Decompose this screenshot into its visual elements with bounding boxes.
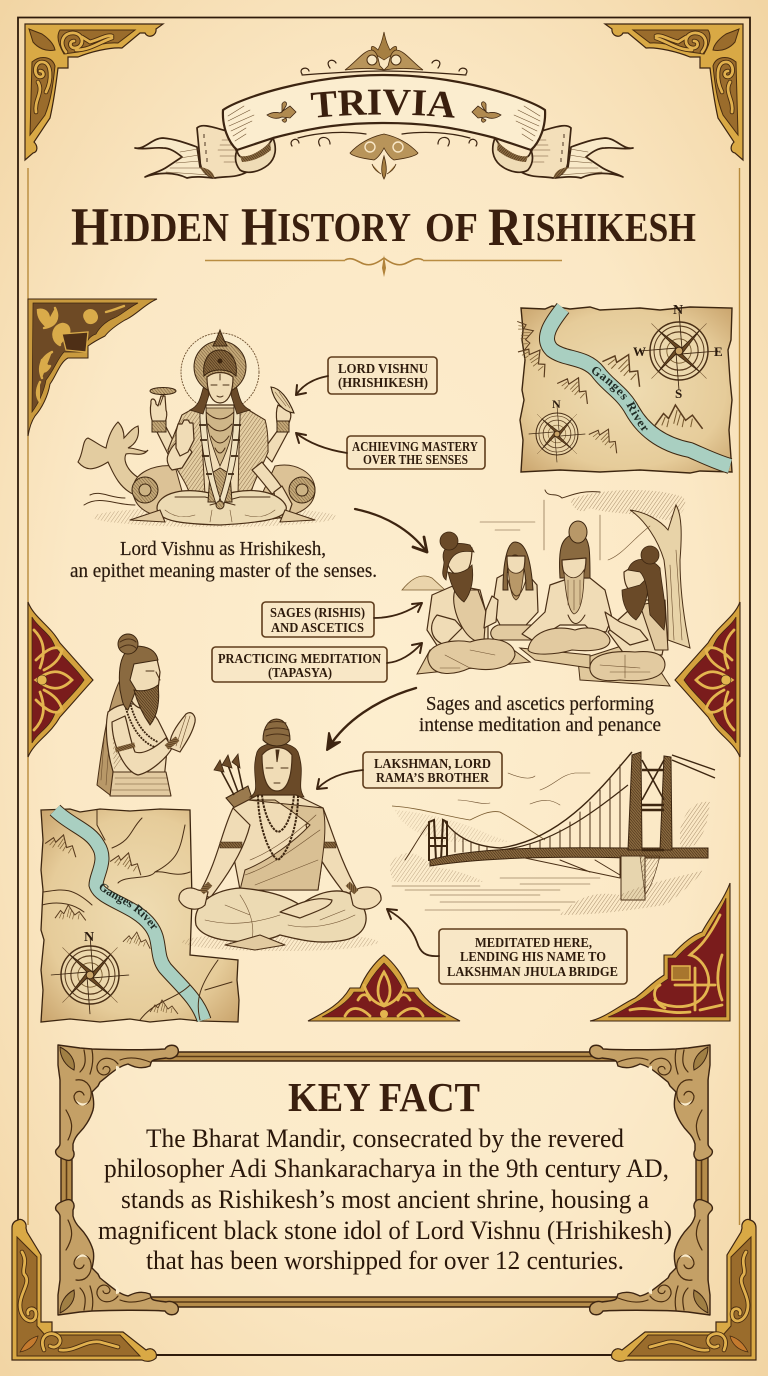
- compass small: N: [552, 397, 561, 411]
- deck: [430, 848, 708, 866]
- illustration: Lakshman meditating: [179, 719, 381, 951]
- compass large: N: [673, 303, 683, 318]
- corner ornament: top right: [605, 24, 743, 160]
- arrow: meditated callout: [387, 909, 439, 956]
- title divider: [205, 255, 562, 277]
- callout: meditated here: MEDITATED HERE,: [475, 935, 592, 950]
- lower cloth: [110, 772, 171, 796]
- bolsters: [132, 465, 315, 520]
- sage centre: [522, 521, 612, 654]
- mats: [417, 640, 530, 674]
- caption: sages: [419, 693, 661, 736]
- red ornament: bottom right corner: [590, 883, 730, 1021]
- praying hands: [170, 713, 195, 752]
- illustration: Lakshman Jhula bridge: [390, 752, 715, 915]
- callout: meditated here: LAKSHMAN JHULA BRIDGE: [447, 964, 618, 979]
- callout: sages and ascetics: [262, 602, 374, 637]
- compass: [51, 930, 129, 1014]
- torso: [106, 704, 168, 780]
- red side ornament: left: [28, 602, 93, 757]
- mountains: [515, 318, 703, 453]
- right ribbon tail: [493, 126, 633, 178]
- callout: Lord Vishnu: [328, 357, 437, 394]
- key fact body text: magnificent black stone idol of Lord Vishnu (Hrishikesh): [98, 1216, 672, 1245]
- river label: Ganges River: [592, 366, 648, 432]
- corner ornament: bottom left: [12, 1219, 156, 1361]
- top knot: [263, 719, 290, 746]
- callout: mastery over the senses: ACHIEVING MASTERY: [352, 439, 478, 454]
- main title: H: [241, 197, 277, 257]
- crossed legs: [157, 491, 286, 525]
- left ribbon tail: [135, 126, 275, 178]
- key fact body text: [98, 1124, 672, 1275]
- callout: practicing meditation: [212, 647, 387, 682]
- illustration: Lord Vishnu: [78, 330, 337, 527]
- main title: R: [488, 197, 523, 257]
- key fact body text: that has been worshipped for over 12 centuries.: [146, 1246, 624, 1275]
- callout: meditated here: [439, 929, 627, 984]
- arrow: mastery callout: [296, 433, 347, 453]
- callout: mastery over the senses: OVER THE SENSES: [363, 452, 468, 467]
- callout: Lord Vishnu: LORD VISHNU: [338, 361, 428, 376]
- sage at back: [491, 542, 542, 640]
- red side ornament: right: [675, 602, 740, 757]
- callout: mastery over the senses: [347, 436, 485, 469]
- compass: N: [84, 930, 94, 945]
- banner title text: TRIVIA: [310, 90, 455, 118]
- crown halo ring: [194, 341, 246, 393]
- river label: Ganges River: [100, 884, 158, 930]
- clouds: [458, 773, 590, 805]
- river: [547, 308, 730, 466]
- caption: sages: intense meditation and penance: [419, 714, 661, 736]
- hills: [392, 806, 545, 840]
- quiver and arrows: [214, 754, 252, 812]
- sage right: [590, 546, 668, 681]
- callout: Lakshman: [363, 752, 502, 788]
- sash: [240, 800, 325, 890]
- arrow: meditation callout: [387, 643, 422, 663]
- ornate frame: [56, 1045, 712, 1315]
- red ornament: bottom centre: [308, 955, 460, 1021]
- map: Ganges River upper: [517, 303, 733, 474]
- garlands: [200, 405, 240, 504]
- illustration: praying sage: [97, 634, 195, 796]
- callout: Lakshman: LAKSHMAN, LORD: [374, 756, 491, 771]
- callout: sages and ascetics: AND ASCETICS: [271, 620, 364, 635]
- main ribbon band: [223, 75, 545, 150]
- arm: [112, 716, 172, 775]
- arrow: Lord Vishnu callout: [296, 376, 328, 395]
- key fact body text: The Bharat Mandir, consecrated by the revered: [146, 1124, 624, 1153]
- necklaces: [258, 795, 298, 860]
- callout: meditated here: LENDING HIS NAME TO: [460, 949, 606, 964]
- torso: [230, 795, 325, 890]
- ground shading: [93, 507, 337, 527]
- crown finial: [213, 330, 227, 346]
- caption: Lord Vishnu: Lord Vishnu as Hrishikesh,: [120, 538, 326, 560]
- suspension cables: [445, 752, 632, 848]
- tributaries and mountains: [42, 810, 232, 1020]
- necklaces: [125, 702, 158, 748]
- key fact body text: philosopher Adi Shankaracharya in the 9th century AD,: [104, 1154, 669, 1183]
- hair: [250, 743, 304, 797]
- callout: Lakshman: RAMA’S BROTHER: [376, 770, 489, 785]
- crest above banner: [301, 32, 467, 75]
- pier: [621, 856, 645, 900]
- arrow: sages to Lakshman: [327, 688, 416, 750]
- legs: [195, 888, 366, 942]
- compass small: [529, 397, 585, 462]
- compass large: E: [714, 344, 723, 359]
- main title: OF: [425, 204, 478, 250]
- caption: Lord Vishnu: an epithet meaning master of the senses.: [70, 560, 377, 582]
- corner ornament: bottom right: [612, 1219, 756, 1361]
- callout: sages and ascetics: SAGES (RISHIS): [270, 605, 365, 620]
- main title: ISTORY: [277, 204, 411, 250]
- arrow: Lakshman callout: [317, 770, 363, 789]
- fleurons in banner: [267, 102, 501, 122]
- flourish under banner: [291, 132, 477, 179]
- callout: practicing meditation: PRACTICING MEDITATION: [218, 651, 381, 666]
- illustration: sages meditating: [402, 490, 690, 686]
- ground: [182, 933, 378, 951]
- lower arms: [167, 440, 192, 470]
- hangers: [455, 765, 620, 852]
- ribbon banner: [134, 32, 634, 180]
- callout: practicing meditation: (TAPASYA): [268, 665, 332, 680]
- face: [207, 372, 233, 403]
- necklaces: [206, 408, 234, 466]
- corner panel ornament: brown top left: [28, 299, 157, 436]
- arms: [200, 808, 250, 898]
- halo: [181, 333, 259, 411]
- river: [55, 810, 204, 1020]
- tree and landscape: [402, 490, 690, 648]
- key fact heading: KEY FACT: [288, 1074, 480, 1120]
- main title: H: [71, 197, 109, 257]
- map: Ganges River lower: [40, 804, 240, 1023]
- main title: ISHIKESH: [522, 204, 696, 250]
- arrow: sages callout: [374, 603, 422, 618]
- arrow: Vishnu to sages: [355, 509, 427, 552]
- water: [392, 878, 600, 910]
- right bank and bushes: [560, 870, 705, 915]
- serpent tail: [78, 422, 148, 495]
- hair back: [97, 680, 130, 795]
- hands: [179, 888, 208, 909]
- large tower: [628, 752, 672, 850]
- sage front left: [427, 532, 515, 673]
- raised arm left: [155, 425, 178, 462]
- torso and drape: [168, 405, 268, 495]
- key fact body text: stands as Rishikesh’s most ancient shrine, housing a: [121, 1185, 649, 1214]
- small tower: [429, 820, 447, 861]
- caption: sages: Sages and ascetics performing: [426, 693, 654, 715]
- raised arm right: [262, 430, 288, 462]
- compass large: W: [633, 344, 646, 359]
- lotus and conch: [150, 388, 176, 394]
- main title: [71, 197, 696, 257]
- callout: Lord Vishnu: (HRISHIKESH): [338, 375, 428, 390]
- left ribbon roll: [236, 138, 275, 172]
- main title: IDDEN: [109, 204, 229, 250]
- key fact panel: [56, 1045, 712, 1315]
- face: [262, 748, 292, 791]
- caption: Lord Vishnu: [70, 538, 377, 582]
- corner ornament: top left: [25, 24, 163, 160]
- centre pendant: [208, 468, 232, 502]
- compass large: [633, 303, 723, 401]
- head and beard: [126, 653, 160, 708]
- crown dome: [204, 350, 236, 376]
- compass large: S: [675, 386, 682, 401]
- hair: [190, 380, 250, 414]
